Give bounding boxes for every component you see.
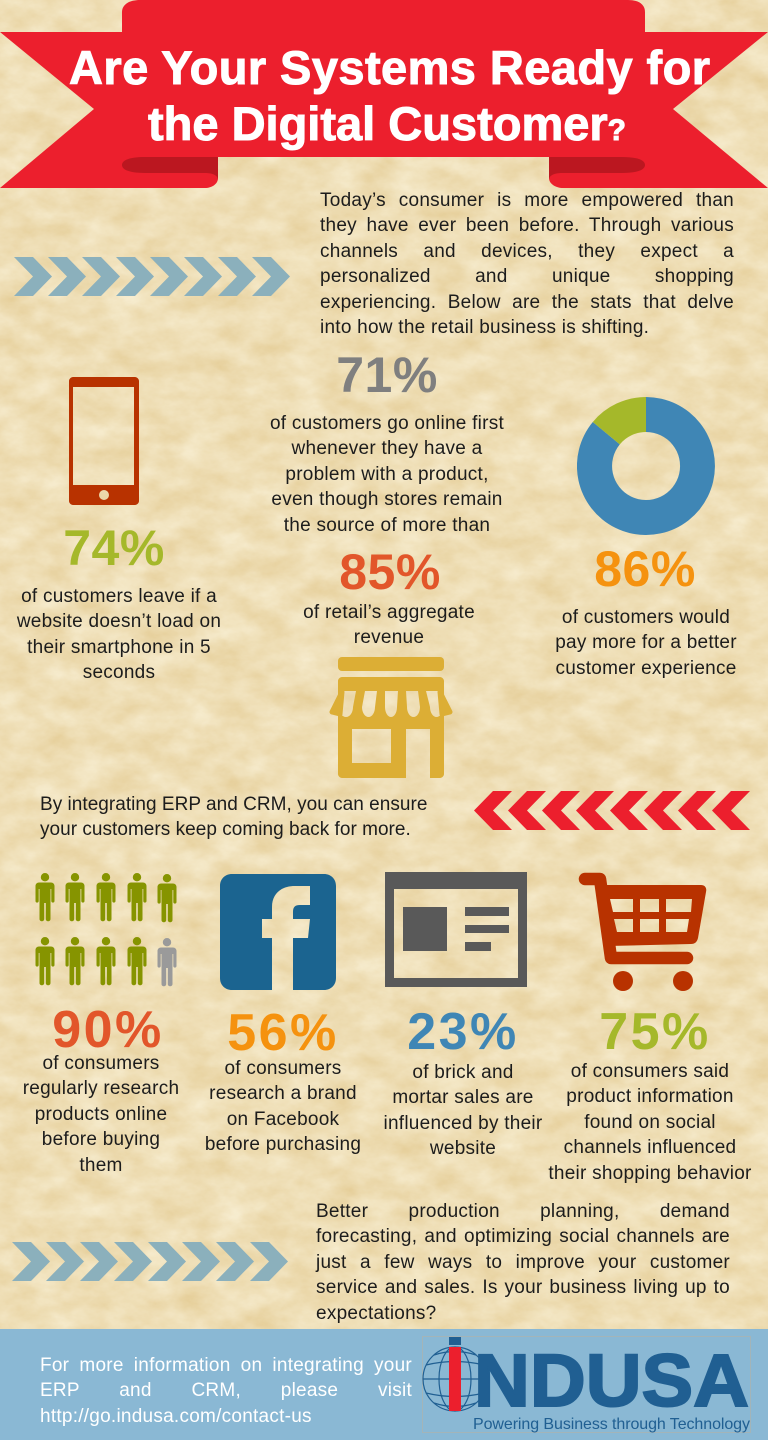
ribbon back panel [122, 0, 645, 33]
title text: Are Your Systems Ready for [69, 41, 710, 94]
footer contact text: http://go.indusa.com/contact-us [40, 1406, 312, 1427]
text: 23% description: influenced by their [384, 1113, 542, 1134]
footer contact text [40, 1355, 412, 1427]
stat: 90%: 90% [52, 1001, 164, 1059]
closing paragraph: forecasting, and optimizing social channels are [316, 1226, 730, 1247]
stat: 86%: 86% [594, 541, 696, 597]
ribbon main band [0, 32, 768, 188]
text: 71% description: of customers go online first [270, 413, 504, 434]
text: 71% description [270, 413, 504, 536]
stat: 74%: 74% [63, 520, 165, 576]
left ribbon fold [122, 157, 218, 180]
footer contact text: ERP and CRM, please visit [40, 1380, 412, 1401]
text: 71% description: whenever they have a [292, 438, 482, 459]
text: 90% description: regularly research [23, 1078, 179, 1099]
stat: 85%: 85% [339, 544, 441, 600]
intro paragraph [320, 190, 734, 338]
closing paragraph [316, 1201, 730, 1324]
text: 86% description: of customers would [562, 607, 730, 628]
text: 90% description: before buying [42, 1129, 160, 1150]
text: 75% description: of consumers said [571, 1061, 729, 1082]
donut segment 14 percent [593, 397, 646, 444]
text: 56% description: of consumers [224, 1058, 342, 1079]
text: 23% description: of brick and [412, 1062, 514, 1083]
icon: bottom chevron arrows [12, 1242, 288, 1281]
intro paragraph: channels and devices, they expect a [320, 241, 734, 262]
text: 75% description: product information [566, 1086, 734, 1107]
text: 86% description [555, 607, 737, 679]
text: 71% description: problem with a product, [285, 464, 489, 485]
icon: shopping cart [578, 872, 706, 991]
text: 74% description: their smartphone in 5 [27, 637, 211, 658]
INDUSA logo [422, 1336, 751, 1433]
closing paragraph: service and sales. Is your business living up to [316, 1277, 730, 1298]
globe [423, 1347, 487, 1411]
intro paragraph: they have ever been before. Through various [320, 215, 734, 236]
text: 74% description: of customers leave if a [21, 586, 217, 607]
text: 90% description: of consumers [42, 1053, 160, 1074]
stat: 75%: 75% [599, 1003, 711, 1061]
text: 90% description: them [79, 1155, 123, 1176]
intro paragraph: Today’s consumer is more empowered than [320, 190, 734, 211]
footer panel [0, 1329, 768, 1440]
intro paragraph: personalized and unique shopping [320, 266, 734, 287]
text: 56% description: before purchasing [205, 1134, 361, 1155]
text: 71% description: the source of more than [284, 515, 490, 536]
red letter i [449, 1347, 461, 1411]
text: integration statement [40, 794, 427, 840]
text: 75% description: found on social [584, 1112, 716, 1133]
wordmark: NDUSA [474, 1339, 749, 1422]
stat: 23%: 23% [407, 1003, 519, 1061]
icon: red chevron arrows [474, 791, 750, 830]
title ribbon banner [0, 0, 768, 188]
text: 56% description: on Facebook [227, 1109, 339, 1130]
text: 75% description: channels influenced [564, 1137, 736, 1158]
tagline: Powering Business through Technology [473, 1416, 750, 1433]
donut chart: 86% [577, 397, 715, 535]
text: 86% description: customer experience [555, 658, 737, 679]
text: integration statement: By integrating ERP and CRM, you can ensure [40, 794, 427, 815]
text: 86% description: pay more for a better [555, 632, 737, 653]
text: 74% description: website doesn’t load on [17, 611, 221, 632]
text: integration statement: your customers keep coming back for more. [40, 819, 411, 840]
intro paragraph: experiencing. Below are the stats that delve [320, 292, 734, 313]
icon: storefront [330, 657, 452, 778]
right ribbon fold [549, 157, 645, 180]
text: 90% description [23, 1053, 179, 1176]
text: 90% description: products online [35, 1104, 167, 1125]
closing paragraph: Better production planning, demand [316, 1201, 730, 1222]
footer contact text: For more information on integrating your [40, 1355, 412, 1376]
intro paragraph: into how the retail business is shifting. [320, 317, 649, 338]
text: 74% description [16, 586, 221, 683]
icon: ten people, nine highlighted [36, 873, 176, 986]
text: 85% description [303, 602, 475, 648]
text: 71% description: even though stores remain [271, 489, 503, 510]
icon: smartphone [69, 377, 139, 505]
text: 75% description [548, 1061, 752, 1184]
text: 75% description: their shopping behavior [548, 1163, 752, 1184]
stat: 56%: 56% [227, 1004, 339, 1062]
text: 23% description: mortar sales are [392, 1087, 534, 1108]
title text [69, 41, 710, 150]
icon: top chevron arrows [14, 257, 290, 296]
text: 85% description: of retail’s aggregate [303, 602, 475, 623]
icon: facebook [220, 874, 336, 990]
text: 56% description: research a brand [209, 1083, 357, 1104]
icon: web page [385, 872, 527, 987]
stat: 71%: 71% [336, 347, 438, 403]
text: 23% description: website [430, 1138, 496, 1159]
text: 56% description [205, 1058, 361, 1155]
text: 85% description: revenue [354, 627, 424, 648]
closing paragraph: expectations? [316, 1303, 436, 1324]
title text: the Digital Customer? [148, 97, 626, 150]
text: 23% description [384, 1062, 542, 1159]
closing paragraph: just a few ways to improve your customer [316, 1252, 730, 1273]
donut segment 86 percent [577, 397, 715, 535]
text: 74% description: seconds [83, 662, 155, 683]
